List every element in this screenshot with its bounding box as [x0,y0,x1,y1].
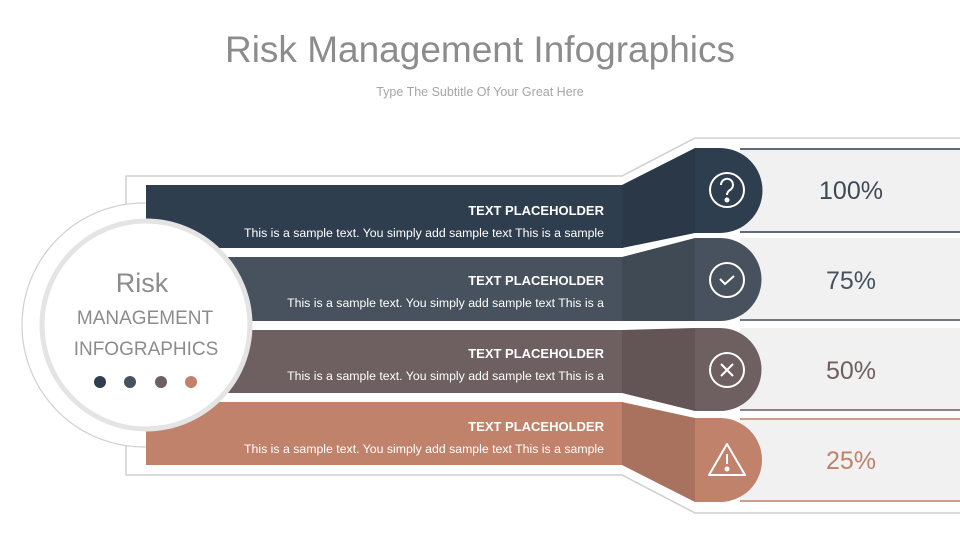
icon: warning [709,444,745,475]
row 2 [228,238,960,321]
row 4: TEXT PLACEHOLDER [468,419,605,434]
row 4 [146,402,960,502]
row 1 [146,148,960,248]
center circle [42,221,250,429]
row 2: This is a sample text. You simply add sample text This is a [287,296,604,310]
row 2: 75% [826,267,876,295]
row 2: TEXT PLACEHOLDER [468,273,605,288]
title: Risk Management Infographics [225,29,735,70]
row 1: This is a sample text. You simply add sample text This is a sample [244,226,604,240]
center circle: INFOGRAPHICS [74,339,218,360]
subtitle: Type The Subtitle Of Your Great Here [376,85,584,99]
center circle: MANAGEMENT [77,308,213,329]
outer circle [21,202,146,448]
icon: x [710,353,744,387]
row 3 [228,328,960,411]
row 1: 100% [819,177,883,205]
icon: question [710,173,744,207]
row 1: TEXT PLACEHOLDER [468,203,605,218]
row 4: 25% [826,447,876,475]
outline frame [126,138,960,513]
row 3: TEXT PLACEHOLDER [468,346,605,361]
row 3: 50% [826,357,876,385]
center circle: Risk [116,268,169,298]
row 3: This is a sample text. You simply add sample text This is a [287,369,604,383]
row 4: This is a sample text. You simply add sample text This is a sample [244,442,604,456]
icon: check [710,263,744,297]
